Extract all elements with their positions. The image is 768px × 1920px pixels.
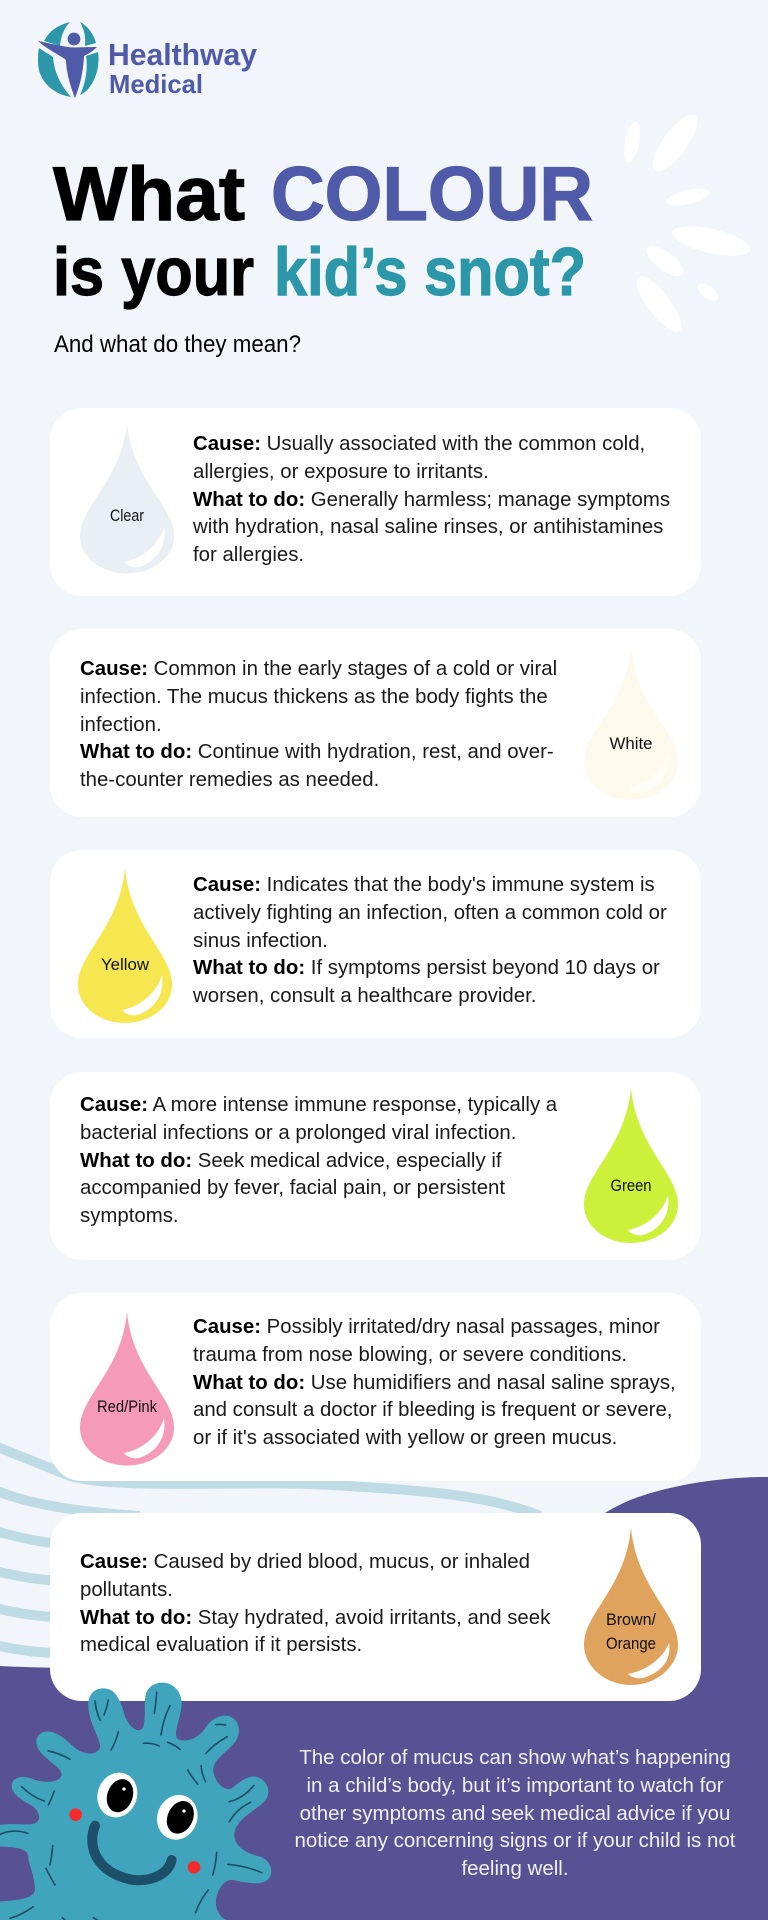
icon: white drop: White xyxy=(610,734,652,753)
text: green xyxy=(80,1094,558,1227)
text: clear: allergies, or exposure to irritants. xyxy=(193,461,489,483)
footer note: notice any concerning signs or if your child is not xyxy=(294,1829,735,1852)
text: brown/orange: pollutants. xyxy=(80,1579,173,1601)
decorative splash xyxy=(624,114,750,332)
title: What xyxy=(53,152,245,237)
purple blob xyxy=(0,1477,768,1920)
virus left eye xyxy=(91,1767,144,1823)
icon: pink drop xyxy=(80,1312,174,1466)
text: clear: What to do: Generally harmless; manage symptoms xyxy=(193,489,670,511)
text: green: What to do: Seek medical advice, especially if xyxy=(80,1150,502,1172)
text: clear xyxy=(193,433,670,566)
title: COLOUR xyxy=(271,152,593,237)
virus texture strokes xyxy=(0,1692,262,1920)
text: clear: Cause: Usually associated with the common cold, xyxy=(193,433,645,455)
icon: green drop xyxy=(584,1088,678,1243)
text: white: What to do: Continue with hydration, rest, and over- xyxy=(80,741,554,763)
logo wordmark xyxy=(108,37,258,99)
virus smile xyxy=(92,1826,172,1880)
panel: clear xyxy=(50,408,701,596)
text: yellow: What to do: If symptoms persist beyond 10 days or xyxy=(193,957,660,979)
footer note: feeling well. xyxy=(461,1857,569,1880)
text: white xyxy=(80,658,557,791)
icon: green drop: Green xyxy=(610,1176,652,1195)
icon: yellow drop xyxy=(78,868,172,1023)
text: white: Cause: Common in the early stages of a cold or viral xyxy=(80,658,557,680)
footer note: The color of mucus can show what’s happening xyxy=(299,1746,731,1769)
panel: yellow xyxy=(50,850,701,1038)
text: yellow: worsen, consult a healthcare provider. xyxy=(193,985,536,1007)
text: red/pink: or if it's associated with yellow or green mucus. xyxy=(193,1427,617,1449)
text: green: Cause: A more intense immune response, typically a xyxy=(80,1094,557,1116)
text: white: infection. The mucus thickens as the body fights the xyxy=(80,686,548,708)
text: yellow: sinus infection. xyxy=(193,930,328,952)
text: green: symptoms. xyxy=(80,1205,179,1227)
panel: green xyxy=(50,1072,701,1260)
icon: yellow drop: Yellow xyxy=(101,955,150,974)
text: clear: with hydration, nasal saline rinses, or antihistamines xyxy=(193,516,663,538)
virus right eye xyxy=(151,1789,204,1845)
icon: pink drop: Red/Pink xyxy=(97,1397,157,1416)
virus body xyxy=(0,1683,271,1920)
text: red/pink: and consult a doctor if bleeding is frequent or severe, xyxy=(193,1399,672,1421)
icon: brown drop xyxy=(584,1528,678,1685)
logo wordmark: Healthway xyxy=(108,37,258,72)
title: is your xyxy=(53,234,254,310)
text: white: the-counter remedies as needed. xyxy=(80,769,379,791)
panel: white xyxy=(50,629,701,817)
footer note xyxy=(294,1746,736,1880)
text: brown/orange: What to do: Stay hydrated, avoid irritants, and seek xyxy=(80,1607,550,1629)
icon: clear drop xyxy=(80,424,174,574)
icon: brown drop: Brown/ xyxy=(606,1610,656,1629)
text: red/pink: What to do: Use humidifiers and nasal saline sprays, xyxy=(193,1372,676,1394)
text: red/pink: Cause: Possibly irritated/dry nasal passages, minor xyxy=(193,1316,660,1338)
text: red/pink: trauma from nose blowing, or severe conditions. xyxy=(193,1344,627,1366)
text: green: accompanied by fever, facial pain, or persistent xyxy=(80,1177,505,1199)
text: brown/orange xyxy=(80,1551,550,1656)
panel: brown/orange xyxy=(50,1513,701,1701)
text: yellow: actively fighting an infection, often a common cold or xyxy=(193,902,667,924)
text: clear: for allergies. xyxy=(193,544,304,566)
subtitle: And what do they mean? xyxy=(54,331,301,358)
footer note: in a child’s body, but it’s important to watch for xyxy=(306,1774,724,1797)
text: green: bacterial infections or a prolonged viral infection. xyxy=(80,1122,516,1144)
icon: virus mascot xyxy=(0,1682,272,1920)
logo wordmark: Medical xyxy=(109,69,203,99)
text: white: infection. xyxy=(80,714,162,736)
logo xyxy=(38,22,258,99)
icon: clear drop: Clear xyxy=(110,506,144,525)
text: yellow: Cause: Indicates that the body's immune system is xyxy=(193,874,655,896)
logo emblem xyxy=(38,22,99,98)
title: kid’s snot? xyxy=(274,234,586,310)
text: yellow xyxy=(193,874,667,1007)
light blue wavy lines xyxy=(0,1446,540,1653)
icon: white drop xyxy=(584,650,678,800)
text: red/pink xyxy=(193,1316,676,1449)
icon: brown drop: Orange xyxy=(606,1634,656,1653)
text: brown/orange: Cause: Caused by dried blood, mucus, or inhaled xyxy=(80,1551,530,1573)
footer note: other symptoms and seek medical advice if you xyxy=(300,1802,730,1825)
virus cheeks xyxy=(69,1808,200,1874)
text: brown/orange: medical evaluation if it persists. xyxy=(80,1634,362,1656)
panel: red/pink xyxy=(50,1293,701,1481)
title xyxy=(52,152,593,310)
